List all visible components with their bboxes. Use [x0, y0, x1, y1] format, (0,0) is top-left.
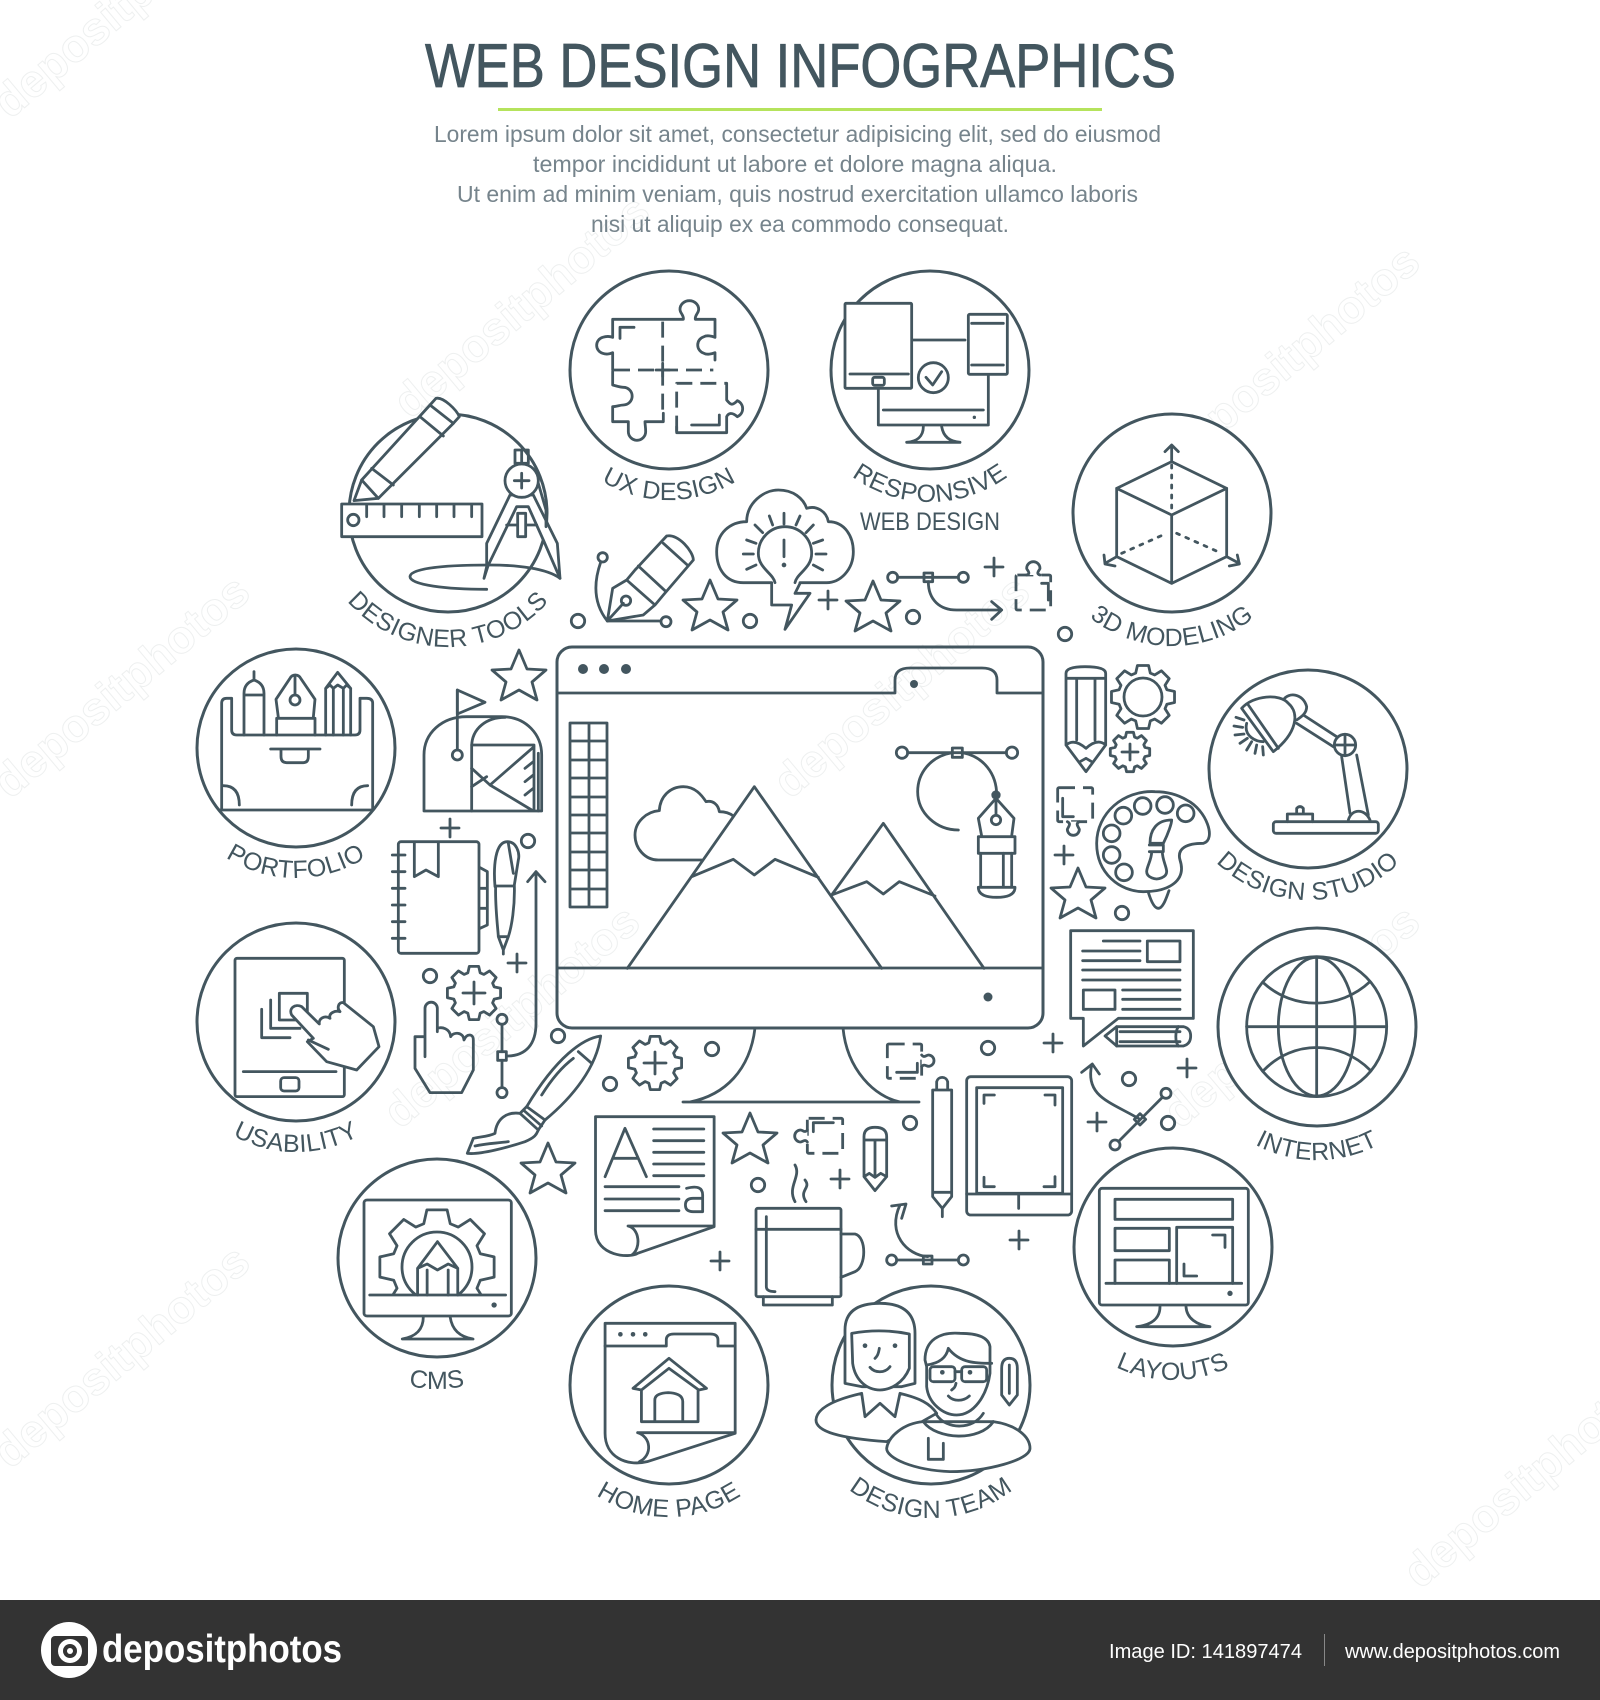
icon: pen, cloud and bolt [596, 490, 853, 629]
icon: briefcase with pens [220, 672, 373, 810]
intro paragraph: nisi ut aliquip ex ea commodo consequat. [591, 211, 1009, 237]
label: USABILITY [236, 1120, 352, 1152]
label: WEB DESIGN [860, 508, 1000, 536]
circle [832, 1286, 1030, 1484]
panel: design team [814, 1284, 1032, 1518]
circle [1218, 928, 1416, 1126]
panel: responsive web design [830, 270, 1030, 536]
title: WEB DESIGN INFOGRAPHICS [425, 32, 1176, 101]
central monitor [557, 647, 1043, 1102]
intro paragraph [434, 121, 1161, 237]
icon: tablet, stylus, mug, curves, puzzles [756, 1044, 1171, 1305]
label: CMS [411, 1370, 464, 1389]
label: DESIGN TEAM [850, 1476, 1012, 1518]
intro paragraph: Lorem ipsum dolor sit amet, consectetur adipisicing elit, sed do eiusmod [434, 121, 1161, 147]
label [853, 463, 1008, 536]
label: HOME PAGE [598, 1481, 740, 1518]
icon: palette, pencil, puzzle, article chat [1058, 667, 1209, 1046]
image id: Image ID: 141897474 [1109, 1641, 1302, 1663]
watermark: depositphotos [383, 184, 659, 428]
circle [831, 271, 1029, 469]
panel: design studio [1208, 668, 1408, 900]
panel: usability [196, 922, 396, 1152]
footer divider [1324, 1634, 1325, 1666]
icon: desk lamp [1234, 695, 1378, 833]
circle [197, 923, 395, 1121]
icon: layout monitor [1099, 1188, 1248, 1327]
icon: pencil, ruler, compass [342, 398, 560, 589]
watermark: depositphotos [1153, 894, 1429, 1138]
circle [197, 649, 395, 847]
intro paragraph: Ut enim ad minim veniam, quis nostrud exercitation ullamco laboris [457, 181, 1138, 207]
picture: cloud, mountains, vector pen [627, 747, 1018, 968]
icon: gears [447, 665, 1175, 1090]
circle [338, 1159, 536, 1357]
panel: layouts [1072, 1146, 1274, 1380]
circle [1074, 1148, 1272, 1346]
watermark: depositphotos [763, 564, 1039, 808]
brand name: depositphotos [102, 1628, 342, 1671]
icon: devices [845, 303, 1007, 442]
icon: cube [1104, 445, 1239, 583]
label: PORTFOLIO [227, 844, 362, 878]
label: INTERNET [1257, 1130, 1373, 1160]
label: RESPONSIVE [853, 463, 1008, 502]
watermark: depositphotos [1153, 234, 1429, 478]
icon: two designers [816, 1303, 1030, 1472]
panel: designer tools [340, 396, 562, 648]
circle [570, 271, 768, 469]
circle [570, 1286, 768, 1484]
icon: tablet touch [235, 958, 379, 1097]
toolbar grid [570, 723, 607, 907]
title underline [498, 108, 1102, 111]
panel: internet [1216, 926, 1418, 1160]
icon: mailbox, notebook, pen, hand, node arrow [392, 690, 545, 1098]
intro paragraph: tempor incididunt ut labore et dolore magna aliqua. [533, 151, 1057, 177]
icon: node curve and puzzle top right [888, 562, 1051, 619]
icon: camera logo [41, 1622, 97, 1678]
monitor stand [683, 1028, 919, 1102]
icon: paint brush [467, 1036, 601, 1154]
circle [1073, 414, 1271, 612]
circle [1209, 670, 1407, 868]
watermark: depositphotos [373, 894, 649, 1138]
panel: home page [568, 1284, 770, 1518]
label: DESIGNER TOOLS [348, 590, 546, 648]
icon: puzzle [597, 301, 743, 440]
panel: ux design [568, 270, 770, 500]
panel: portfolio [196, 648, 396, 878]
icon: monitor with gear [364, 1200, 511, 1339]
label: DESIGN STUDIO [1217, 850, 1396, 900]
website: www.depositphotos.com [1344, 1641, 1560, 1663]
panel: 3d modeling [1072, 412, 1272, 646]
icon: globe [1247, 957, 1387, 1097]
label: UX DESIGN [605, 467, 734, 500]
circle [349, 414, 547, 612]
label: LAYOUTS [1118, 1352, 1228, 1380]
footer bar [0, 1600, 1600, 1700]
icon: article page [596, 1117, 714, 1256]
panel: cms [336, 1158, 538, 1389]
label: 3D MODELING [1092, 606, 1252, 646]
icon: browser with house [605, 1323, 735, 1463]
small decorations: stars, plus signs, rings [423, 558, 1196, 1270]
